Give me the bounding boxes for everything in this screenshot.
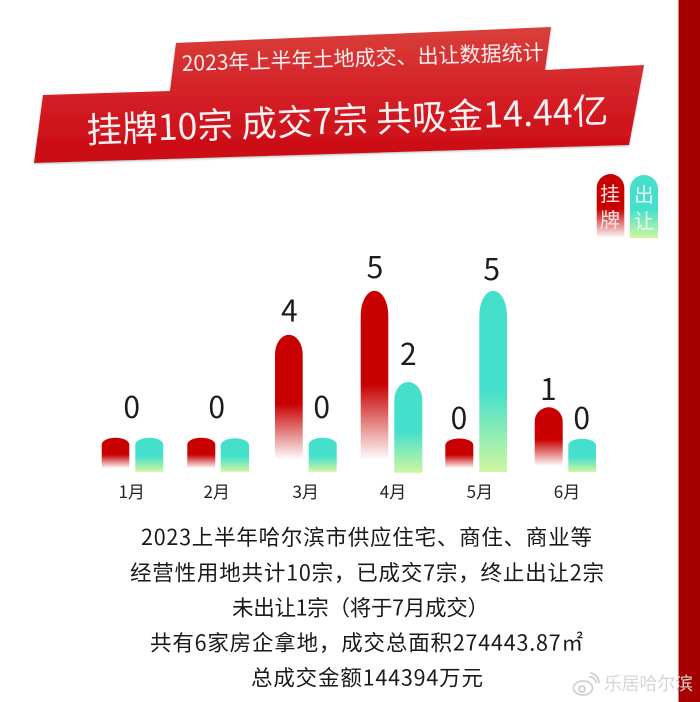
March bars: 0 <box>313 383 330 427</box>
summary text block <box>130 521 604 693</box>
April bars <box>361 243 422 503</box>
April bars: 4月 <box>380 478 406 503</box>
May bars: 5 <box>483 245 500 289</box>
May bars: 5月 <box>467 478 493 503</box>
summary text block: 总成交金额144394万元 <box>251 662 483 693</box>
March bars: 3月 <box>292 478 319 503</box>
legend: listed: 牌 <box>600 204 620 233</box>
icon: weibo logo <box>574 673 599 695</box>
title banner <box>34 27 644 163</box>
bar chart <box>102 243 596 503</box>
banner headline: 挂牌10宗 成交7宗 共吸金14.44亿 <box>85 83 609 154</box>
legend: transferred: 让 <box>634 205 654 234</box>
May bars: 0 <box>451 394 467 438</box>
February bars <box>187 383 249 503</box>
March bars: 4 <box>281 287 298 331</box>
watermark text: 乐居哈尔滨 <box>604 670 693 696</box>
June bars: 6月 <box>554 478 580 503</box>
summary text block: 未出让1宗（将于7月成交） <box>232 592 489 623</box>
February bars: 2月 <box>203 478 230 503</box>
May bars <box>445 245 507 503</box>
summary text block: 经营性用地共计10宗，已成交7宗，终止出让2宗 <box>130 556 604 588</box>
January bars: 1月 <box>118 478 145 503</box>
watermark <box>574 670 693 696</box>
banner subtitle: 2023年上半年土地成交、出让数据统计 <box>181 37 544 78</box>
legend: transferred <box>630 175 658 238</box>
summary text block: 2023上半年哈尔滨市供应住宅、商住、商业等 <box>141 521 592 552</box>
June bars <box>535 365 596 503</box>
legend: listed <box>597 174 624 238</box>
February bars: 0 <box>208 383 225 427</box>
right red band <box>678 0 700 702</box>
January bars <box>102 383 163 503</box>
legend: listed: 挂 <box>600 178 620 207</box>
April bars: 2 <box>400 330 417 374</box>
April bars: 5 <box>367 243 383 287</box>
legend <box>597 174 658 238</box>
June bars: 0 <box>573 394 590 438</box>
June bars: 1 <box>540 365 557 409</box>
summary text block: 共有6家房企拿地，成交总面积274443.87㎡ <box>150 627 583 658</box>
legend: transferred: 出 <box>634 179 654 208</box>
March bars <box>275 287 337 503</box>
January bars: 0 <box>123 383 140 427</box>
